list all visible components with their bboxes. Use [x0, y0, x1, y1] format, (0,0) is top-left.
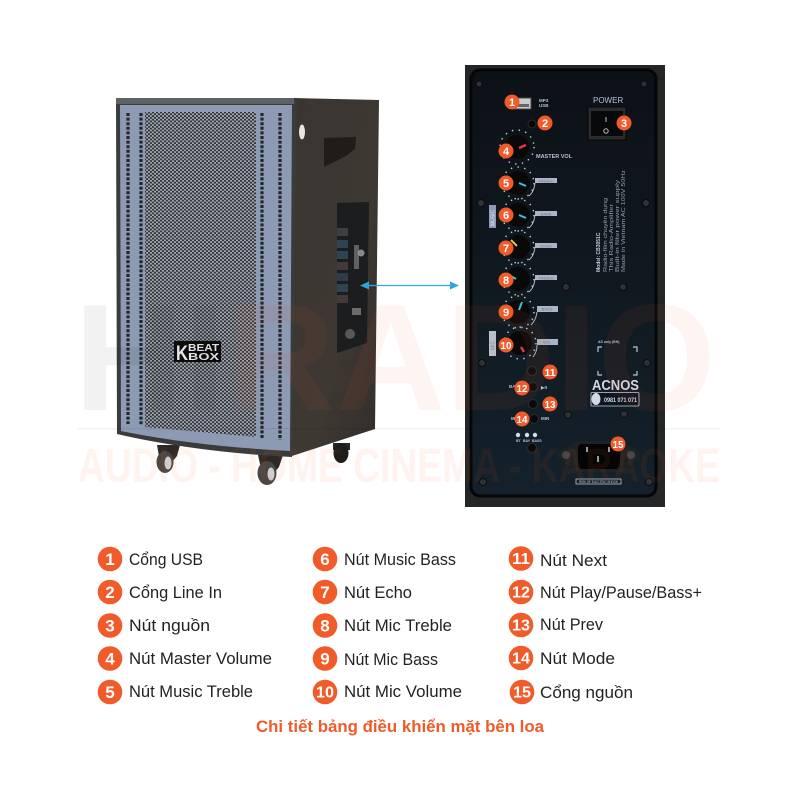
legend item 8: Nút Mic Treble: [344, 616, 452, 635]
logo: KBEAT BOX: BEAT: [188, 343, 219, 354]
legend item 10: 10: [316, 684, 334, 702]
panel number badges: 9: [503, 307, 509, 319]
indicator LEDs: BAY: [523, 439, 531, 443]
knob 4: master volume: [500, 130, 573, 164]
panel screws: [476, 81, 652, 486]
panel number badges: 6: [503, 210, 509, 222]
legend item 14: Nút Mode: [540, 649, 615, 668]
knob 4: master volume: MASTER VOL: [536, 154, 573, 160]
button captions: BASS: [509, 384, 522, 389]
side handle: [324, 137, 356, 167]
side white pin: [299, 124, 305, 140]
legend item 10: Nút Mic Volume: [344, 682, 462, 701]
line in jack: [528, 120, 536, 128]
legend item 4: [98, 646, 272, 671]
vertical spec text: Model: CB3051C: [596, 232, 602, 272]
legend item 7: [313, 580, 412, 604]
legend item 13: Nút Prev: [540, 615, 603, 634]
legend item 12: Nút Play/Pause/Bass+: [540, 583, 702, 602]
legend item 14: 14: [512, 650, 530, 668]
knob 6: music bass: MUSIC: [490, 210, 496, 226]
panel number badges: 8: [503, 275, 509, 287]
panel number badges: 7: [503, 243, 509, 255]
legend item 4: Nút Master Volume: [129, 649, 272, 668]
panel number badges: 11: [544, 368, 556, 379]
legend item 11: 11: [512, 551, 530, 568]
ACNOS brand: [591, 378, 639, 406]
cabinet front frame: [116, 98, 297, 457]
legend item 15: Cổng nguồn: [540, 683, 633, 702]
knob 10: mic volume: [489, 327, 558, 359]
legend item 12: 12: [512, 584, 530, 602]
legend item 10: [313, 680, 462, 704]
legend column 1: [98, 547, 272, 704]
panel outer frame: [465, 65, 665, 507]
indicator LEDs: [516, 433, 542, 443]
knob 7: echo: [502, 231, 557, 263]
knob 5: music treble: [502, 167, 557, 199]
legend item 9: Nút Mic Bass: [344, 650, 438, 669]
front grille plate: [120, 105, 292, 451]
legend item 8: [313, 613, 452, 638]
logo: KBEAT BOX: [174, 341, 221, 365]
legend item 2: [98, 580, 222, 604]
legend item 11: [509, 546, 607, 571]
legend item 5: [98, 680, 253, 704]
knob 10: mic volume: VOL: [543, 340, 552, 344]
legend column 3: [509, 546, 702, 704]
panel number badges: 1: [509, 97, 515, 109]
panel number badges: 14: [516, 415, 528, 426]
legend item 3: [98, 613, 210, 638]
ACNOS brand: 0981 071 071: [604, 397, 637, 404]
watermark: HIRADIO: [74, 273, 716, 443]
knob 7: echo: ECHO: [540, 244, 552, 248]
cabinet side: [292, 98, 379, 456]
small push buttons: [528, 366, 538, 452]
mesh: [145, 112, 256, 437]
control panel photo: [465, 65, 665, 507]
side control panel miniature: [337, 202, 369, 353]
vertical spec text: Made in Vietnam AC 100V 50Hz: [621, 169, 627, 272]
USB port: MP3: [539, 98, 549, 103]
legend item 15: [510, 680, 633, 704]
power socket: RISK OF ELECTRIC SHOCK: [579, 480, 619, 484]
dashed cut-out: AS only (BH): [598, 340, 619, 344]
knob 8: mic treble: [502, 263, 557, 295]
legend item 11: Nút Next: [540, 551, 607, 570]
knob 6: music bass: [489, 199, 557, 231]
vertical spec text: This Radio-Amplifier: [609, 203, 615, 272]
logo: KBEAT BOX: BOX: [188, 352, 219, 363]
legend item 13: [509, 613, 603, 637]
USB port: [514, 98, 549, 109]
speaker photo: [116, 98, 379, 485]
legend item 13: 13: [512, 618, 530, 634]
legend item 14: [509, 646, 615, 670]
wheels: [156, 443, 350, 485]
vertical spec text: Built-in filter power supply: [615, 179, 621, 272]
legend item 4: 4: [105, 650, 115, 668]
panel number badges: 13: [544, 400, 556, 411]
legend item 5: 5: [105, 683, 115, 702]
power socket: [558, 441, 640, 484]
caption: Chi tiết bảng điều khiển mặt bên loa: [256, 717, 545, 736]
legend item 3: 3: [105, 616, 115, 636]
legend item 6: [313, 547, 456, 571]
legend item 5: Nút Music Treble: [129, 682, 253, 701]
button captions: [509, 384, 549, 421]
legend column 2: [313, 547, 462, 704]
indicator LEDs: BASS: [532, 439, 542, 443]
legend item 6: 6: [320, 550, 330, 569]
knob 6: music bass: BASS: [541, 212, 552, 216]
legend item 2: Cổng Line In: [129, 583, 222, 602]
knob 10: mic volume: MIC: [490, 340, 496, 350]
legend item 12: [509, 580, 702, 604]
ACNOS brand: ACNOS: [592, 378, 639, 394]
vertical spec text: [596, 169, 627, 272]
knob 9: mic bass: BASS: [542, 306, 553, 312]
knob 5: music treble: TREBLE: [538, 178, 554, 184]
dashed cut-out: [598, 340, 637, 375]
power switch: [588, 96, 626, 140]
button captions: MIN: [541, 416, 549, 421]
legend item 2: 2: [105, 583, 115, 602]
legend item 6: Nút Music Bass: [344, 550, 456, 569]
panel number badges: 2: [542, 118, 548, 130]
legend item 15: 15: [513, 684, 531, 702]
knob 8: mic treble: TREBLE: [538, 276, 554, 280]
legend item 3: Nút nguồn: [129, 616, 210, 635]
button captions: MODE: [511, 416, 524, 421]
panel number badges: 4: [503, 146, 510, 158]
button captions: ▶II: [540, 385, 547, 390]
vertical spec text: Radio-film chuyên dụng: [603, 198, 609, 272]
legend item 8: 8: [320, 616, 330, 636]
panel number badges: 12: [516, 384, 528, 395]
knob 9: mic bass: [502, 296, 558, 328]
panel inner plate: [471, 70, 656, 496]
USB port: USB: [539, 103, 549, 108]
panel number badges: 15: [612, 440, 624, 451]
legend item 1: [98, 547, 203, 571]
legend item 9: [313, 646, 438, 671]
panel number badges: 10: [500, 341, 512, 352]
cabinet top edge: [116, 98, 294, 104]
panel number badges: [498, 94, 632, 452]
panel number badges: 5: [503, 178, 509, 190]
legend item 1: Cổng USB: [129, 550, 203, 569]
indicator LEDs: BT: [516, 439, 522, 443]
logo: KBEAT BOX: K: [176, 342, 188, 365]
legend item 1: 1: [105, 550, 115, 569]
legend item 7: Nút Echo: [344, 583, 412, 602]
perforation columns: [128, 113, 280, 440]
legend item 7: 7: [320, 583, 330, 602]
double arrow: [360, 282, 459, 290]
panel number badges: 3: [621, 118, 627, 130]
power switch: POWER: [593, 96, 623, 105]
legend item 9: 9: [320, 650, 330, 668]
